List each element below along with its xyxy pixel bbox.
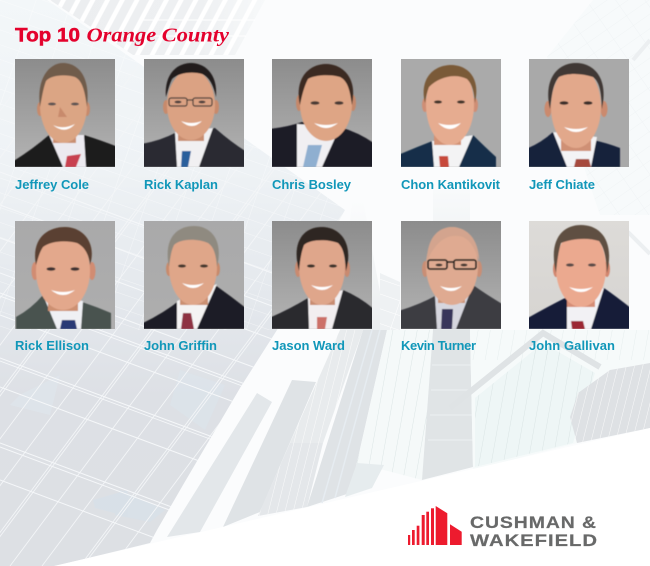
- portrait: Chris Bosley: [272, 59, 372, 167]
- name: John Griffin: John Griffin: [144, 338, 217, 353]
- name: Jason Ward: Jason Ward: [272, 338, 345, 353]
- name: John Gallivan: John Gallivan: [529, 338, 615, 353]
- portrait: Jason Ward: [272, 221, 372, 329]
- wordmark: [470, 513, 598, 550]
- wordmark: CUSHMAN &: [470, 513, 597, 532]
- logo: Cushman & Wakefield: [408, 506, 598, 550]
- portrait: John Gallivan: [529, 221, 629, 329]
- portrait: Rick Kaplan: [144, 59, 244, 167]
- portrait: Jeffrey Cole: [15, 59, 115, 167]
- name: Jeff Chiate: Jeff Chiate: [529, 177, 595, 192]
- name: Chon Kantikovit: Chon Kantikovit: [401, 177, 501, 192]
- name: Chris Bosley: Chris Bosley: [272, 177, 352, 192]
- portrait: Chon Kantikovit: [401, 59, 501, 167]
- title: Top 10: [15, 26, 80, 46]
- portrait: Kevin Turner: [401, 221, 501, 329]
- title: Orange County: [86, 24, 229, 46]
- icon: red building mark: [408, 506, 462, 545]
- portrait: Rick Ellison: [15, 221, 115, 329]
- wordmark: WAKEFIELD: [470, 531, 598, 550]
- title: [15, 24, 229, 46]
- name: Jeffrey Cole: Jeffrey Cole: [15, 177, 89, 192]
- name: Rick Ellison: Rick Ellison: [15, 338, 89, 353]
- portrait: John Griffin: [144, 221, 244, 329]
- name: Rick Kaplan: Rick Kaplan: [144, 177, 218, 192]
- white diagonal footer band: [54, 428, 650, 566]
- name: Kevin Turner: Kevin Turner: [401, 338, 476, 353]
- portrait: Jeff Chiate: [529, 59, 629, 167]
